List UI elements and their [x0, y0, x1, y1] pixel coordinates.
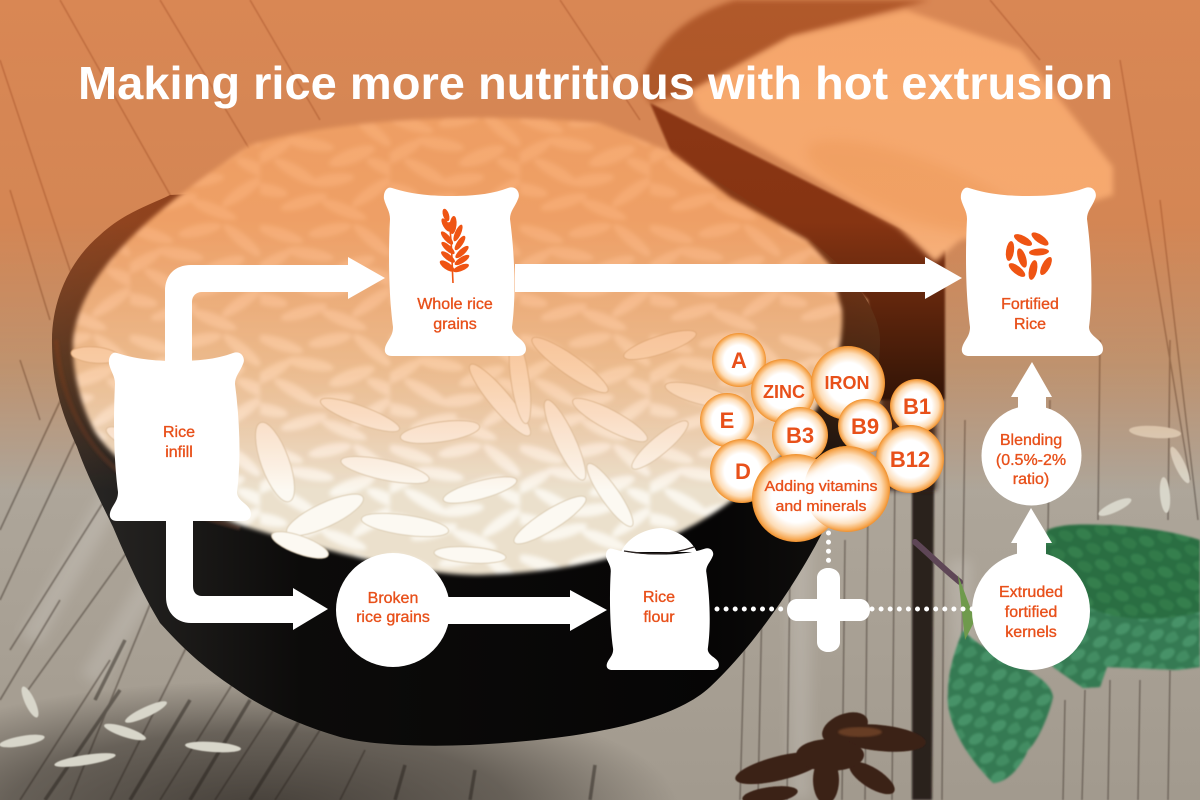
icon: rice kernels — [1005, 230, 1054, 281]
step: blending ratio — [982, 406, 1082, 506]
vitamin and mineral bubbles: B12 — [890, 447, 930, 472]
step: broken rice grains: rice grains — [356, 609, 430, 626]
vitamin and mineral bubbles: ZINC — [763, 382, 805, 402]
sack: whole rice grains: Whole rice — [417, 296, 493, 313]
sack: fortified rice — [961, 187, 1103, 356]
sack: rice flour — [606, 528, 719, 670]
icon: rice stalk — [438, 208, 471, 283]
arrow: rice infill to whole rice grains — [165, 257, 385, 370]
step: extruded fortified kernels: kernels — [1005, 624, 1057, 641]
vitamin and mineral bubbles: A — [731, 348, 747, 373]
step: blending ratio: ratio) — [1013, 471, 1049, 488]
arrow: broken rice grains to rice flour — [440, 590, 607, 631]
plus sign — [787, 568, 870, 652]
step: extruded fortified kernels: fortified — [1005, 604, 1057, 621]
vitamin and mineral bubbles: D — [735, 459, 751, 484]
arrow: extruded kernels to blending — [1011, 508, 1052, 560]
step: extruded fortified kernels: Extruded — [999, 584, 1063, 601]
vitamin and mineral bubbles: B9 — [851, 414, 879, 439]
sack: rice flour: Rice — [643, 589, 675, 606]
arrow: blending to fortified rice — [1011, 362, 1052, 412]
arrow: whole rice grains to fortified rice — [515, 257, 962, 299]
arrow: rice infill to broken rice grains — [166, 510, 328, 630]
step: extruded fortified kernels — [972, 552, 1090, 670]
callout: adding vitamins and minerals: and minerals — [776, 498, 866, 515]
sack: rice flour: flour — [643, 609, 675, 626]
vitamin and mineral bubbles: B3 — [786, 423, 814, 448]
step: blending ratio: (0.5%-2% — [996, 452, 1066, 469]
sack: rice infill: infill — [165, 444, 193, 461]
sack: fortified rice: Rice — [1014, 316, 1046, 333]
title: Making rice more nutritious with hot extrusion — [78, 57, 1113, 109]
step: broken rice grains — [336, 553, 450, 667]
callout: adding vitamins and minerals: Adding vitamins — [764, 478, 878, 495]
vitamin and mineral bubbles — [700, 333, 944, 542]
step: blending ratio: Blending — [1000, 432, 1062, 449]
vitamin and mineral bubbles: IRON — [824, 373, 870, 393]
sack: whole rice grains: grains — [433, 316, 477, 333]
sack: whole rice grains — [384, 187, 526, 356]
vitamin and mineral bubbles: B1 — [903, 394, 931, 419]
sack: rice infill — [109, 352, 251, 521]
callout: adding vitamins and minerals — [752, 446, 890, 542]
sack: fortified rice: Fortified — [1001, 296, 1059, 313]
vitamin and mineral bubbles: E — [720, 408, 734, 433]
sack: rice infill: Rice — [163, 424, 195, 441]
dotted connectors to plus sign — [717, 533, 975, 609]
step: broken rice grains: Broken — [368, 590, 418, 607]
